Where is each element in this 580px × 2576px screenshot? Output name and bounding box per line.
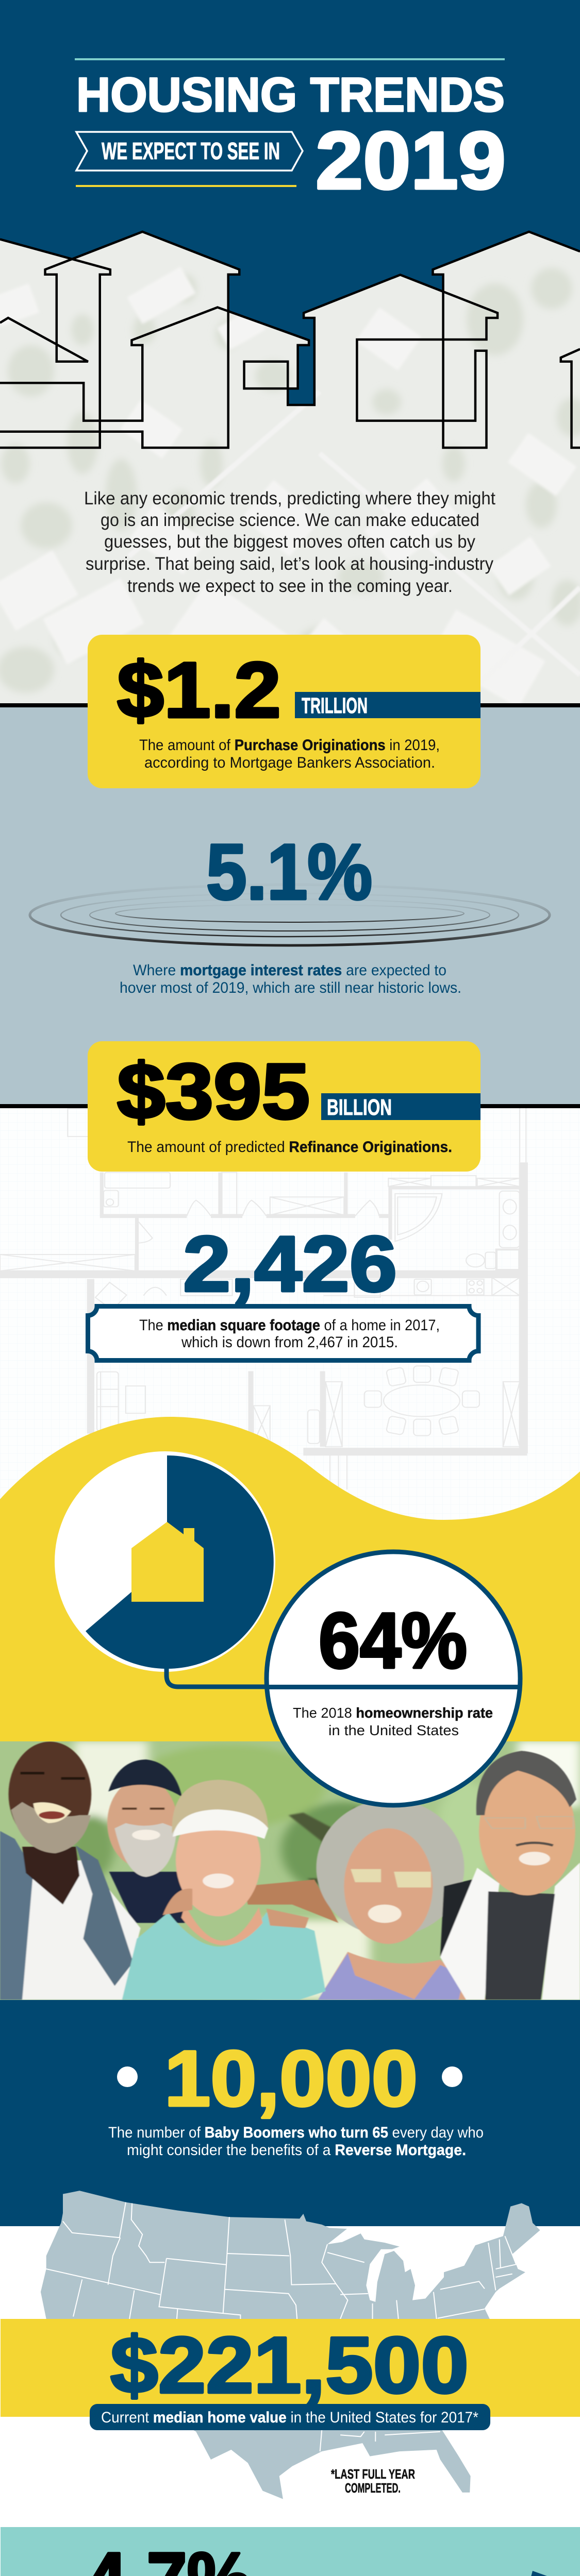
arm <box>244 1879 339 1923</box>
card: refinance originations <box>88 1041 480 1172</box>
panel background: blue-grey band with black rules <box>0 703 580 1108</box>
arrow: rising trend <box>4 2571 560 2576</box>
description: The 2018 homeownership rate <box>293 1705 493 1721</box>
intro text block: go is an imprecise science. We can make educated <box>101 510 479 530</box>
yellow wave panel <box>0 1417 580 1741</box>
caption pill: Current median home value in the United States for 2017* <box>101 2409 478 2426</box>
navy panel: baby boomers <box>0 2000 580 2226</box>
intro text block: trends we expect to see in the coming year. <box>127 576 453 596</box>
title line: housing trends: HOUSING TRENDS <box>76 67 505 122</box>
median home value band <box>1 2319 580 2430</box>
person 3 <box>122 1912 325 1999</box>
description: in the United States <box>328 1722 459 1738</box>
description <box>139 737 440 771</box>
stat: $395: $395 <box>117 1047 310 1136</box>
title block <box>75 58 506 206</box>
person 5 <box>439 1879 473 1957</box>
header panel: navy silhouette above the rooftops <box>0 0 580 405</box>
icon: house <box>131 1522 204 1602</box>
description <box>293 1705 493 1738</box>
label bar: trillion <box>295 692 480 718</box>
stat: 2,426: 2,426 <box>183 1220 397 1308</box>
description: according to Mortgage Bankers Association. <box>144 754 435 771</box>
intro text block: surprise. That being said, let’s look at housing-industry <box>86 554 493 574</box>
homeownership stat <box>55 1451 520 1805</box>
chart: 64% pie <box>55 1451 275 1672</box>
photo: smiling senior friends <box>0 1741 580 2000</box>
teal panel: home value growth <box>1 2527 580 2576</box>
blueprint background with floor plan <box>0 1108 580 1520</box>
icon: ripples <box>30 885 550 945</box>
description: hover most of 2019, which are still near historic lows. <box>120 979 461 996</box>
description <box>108 2124 484 2159</box>
stat circle <box>267 1552 520 1805</box>
label bar: billion: BILLION <box>327 1095 392 1120</box>
person 2 <box>109 1872 185 1923</box>
description: which is down from 2,467 in 2015. <box>181 1334 398 1351</box>
plaque <box>88 1307 478 1360</box>
stat: median square footage <box>88 1220 478 1360</box>
ribbon: we expect to see in <box>76 132 303 171</box>
rooftop outlines <box>0 232 580 448</box>
label bar: trillion: TRILLION <box>302 693 368 718</box>
footnote: COMPLETED. <box>345 2480 401 2496</box>
connector line <box>167 1668 266 1687</box>
intro text block <box>84 488 495 596</box>
description <box>139 1317 440 1351</box>
ribbon: we expect to see in: WE EXPECT TO SEE IN <box>102 138 280 164</box>
caption pill <box>90 2404 490 2430</box>
description: Where mortgage interest rates are expected to <box>133 962 446 979</box>
footnote <box>331 2466 415 2496</box>
stat: 10,000: 10,000 <box>164 2035 418 2123</box>
stat: $221,500: $221,500 <box>110 2320 469 2410</box>
title rule: yellow <box>76 185 296 187</box>
description: might consider the benefits of a Reverse Mortgage. <box>127 2142 466 2159</box>
stat: $1.2: $1.2 <box>117 646 281 734</box>
bullet <box>117 2066 138 2087</box>
stat: 64%: 64% <box>319 1597 467 1685</box>
bullet <box>442 2066 462 2087</box>
label bar: billion <box>321 1093 480 1120</box>
stat: mortgage interest rates <box>30 828 550 996</box>
description <box>120 962 461 996</box>
baby boomers stat <box>108 2035 484 2159</box>
card: purchase originations <box>88 635 480 788</box>
title year: 2019: 2019 <box>316 115 506 206</box>
aerial neighbourhood photo background <box>0 206 580 709</box>
person 4 <box>316 1800 464 1936</box>
description: The median square footage of a home in 2017, <box>139 1317 440 1334</box>
intro text block: Like any economic trends, predicting where they might <box>84 488 495 509</box>
description: The amount of Purchase Originations in 2019, <box>139 737 440 754</box>
person 1 <box>20 1860 141 1999</box>
intro text block: guesses, but the biggest moves often catch us by <box>104 532 475 552</box>
description: The number of Baby Boomers who turn 65 every day who <box>108 2124 484 2141</box>
stat: 5.1%: 5.1% <box>206 828 372 916</box>
description: The amount of predicted Refinance Originations. <box>127 1139 452 1156</box>
map of the United States <box>41 2191 540 2499</box>
footnote: *LAST FULL YEAR <box>331 2466 415 2482</box>
title rule: teal <box>75 58 505 60</box>
